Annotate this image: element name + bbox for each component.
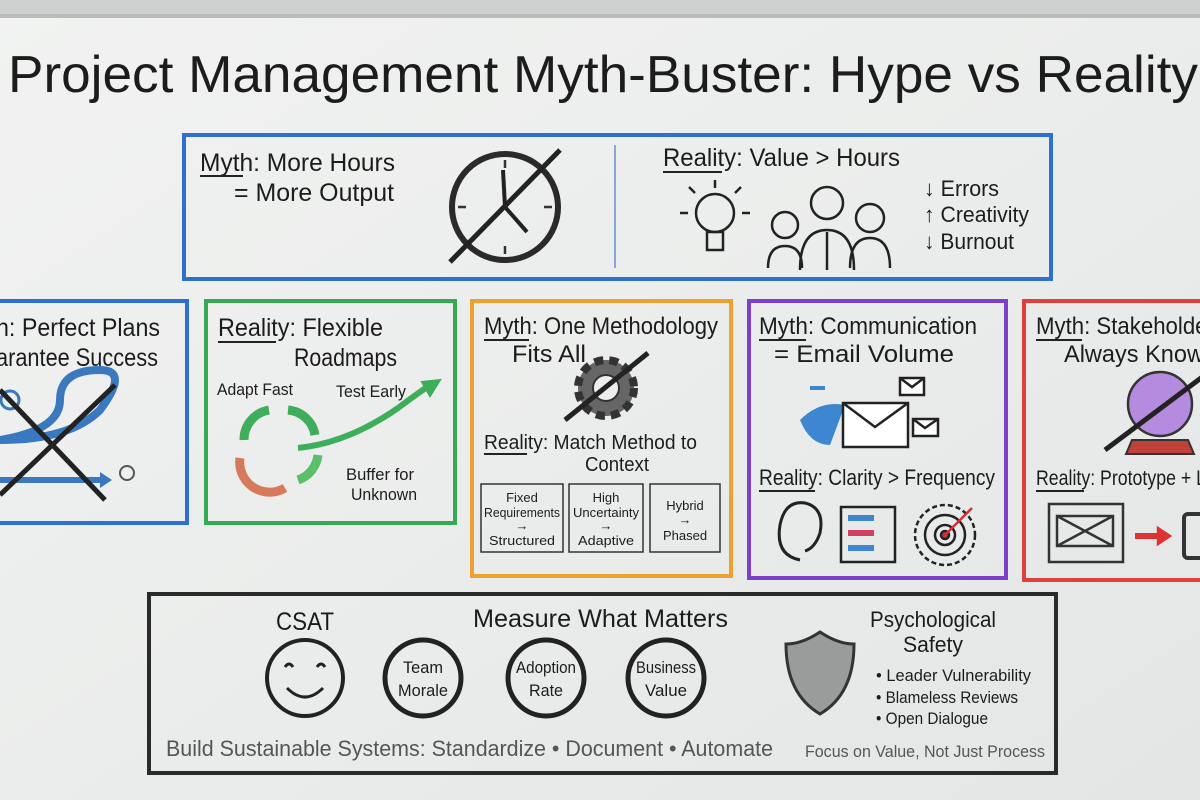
list: errors creativity burnout: ↓ Errors <box>924 176 999 201</box>
icon: crossed clock <box>450 150 560 262</box>
list: errors creativity burnout <box>924 176 1029 254</box>
panel: communication (purple): Myth: Communication <box>759 313 977 340</box>
panel: flexible roadmaps (green) <box>206 301 455 523</box>
psychological safety list: • Blameless Reviews <box>876 688 1018 707</box>
icon: crossed gear <box>565 353 648 420</box>
panel: stakeholders (red) <box>1024 301 1200 580</box>
list: errors creativity burnout: ↓ Burnout <box>924 229 1014 254</box>
metric: business value <box>628 640 704 716</box>
boxes: methodology options: High <box>593 490 619 505</box>
psychological safety list: Safety <box>903 632 963 657</box>
icon: light bulb <box>680 180 750 250</box>
boxes: methodology options: Structured <box>489 533 555 548</box>
panel: one methodology (orange): Myth: One Methodology <box>484 313 718 340</box>
panel: measure what matters: Measure What Matters <box>473 605 728 633</box>
metric: CSAT smiley: CSAT <box>276 608 334 636</box>
metric: CSAT smiley <box>267 608 343 716</box>
psychological safety list: Psychological <box>870 607 996 632</box>
psychological safety list: • Open Dialogue <box>876 709 988 728</box>
icon: target <box>915 505 975 565</box>
panel: perfect plans (blue): arantee Success <box>0 344 158 372</box>
metric: adoption rate: Rate <box>529 681 563 700</box>
metric: business value: Value <box>645 681 687 700</box>
panel: measure what matters: Focus on Value, Not Just Process <box>805 742 1045 761</box>
icon: wireframe to device <box>1049 504 1200 562</box>
panel: flexible roadmaps (green): Unknown <box>351 485 417 504</box>
panel: communication (purple): = Email Volume <box>774 341 954 368</box>
metric: adoption rate <box>508 640 584 716</box>
panel: flexible roadmaps (green): Reality: Flexible <box>218 314 383 342</box>
boxes: methodology options: → <box>516 518 528 533</box>
panel: measure what matters <box>149 594 1056 773</box>
boxes: methodology options: Adaptive <box>578 533 634 548</box>
panel: flexible roadmaps (green): Adapt Fast <box>217 380 293 399</box>
panel: communication (purple): Reality: Clarity > Frequency <box>759 465 995 490</box>
boxes: methodology options: Hybrid <box>666 498 704 513</box>
icon: shield <box>786 632 854 714</box>
icon: cycle arrows <box>240 380 440 492</box>
panel: flexible roadmaps (green): Test Early <box>336 382 406 401</box>
metric: adoption rate: Adoption <box>516 658 576 677</box>
boxes: methodology options: → <box>600 518 612 533</box>
myth text: Myth: More Hours <box>200 149 395 177</box>
metric: team morale: Team <box>403 658 443 677</box>
panel: one methodology (orange): Reality: Match Method to <box>484 432 697 454</box>
panel: one methodology (orange): Context <box>585 454 649 476</box>
panel: perfect plans (blue): h: Perfect Plans <box>0 314 160 342</box>
boxes: methodology options: Uncertainty <box>573 505 640 520</box>
boxes: methodology options: Phased <box>663 528 707 543</box>
boxes: methodology options: Requirements <box>484 505 560 520</box>
psychological safety list: • Leader Vulnerability <box>876 666 1031 685</box>
panel: flexible roadmaps (green): Buffer for <box>346 465 414 484</box>
boxes: methodology options: → <box>678 512 692 527</box>
icon: people <box>768 187 890 270</box>
boxes: methodology options: Fixed <box>506 490 538 505</box>
metric: team morale: Morale <box>398 681 448 700</box>
panel: one methodology (orange): Fits All <box>512 341 586 368</box>
metric: team morale <box>385 640 461 716</box>
myth text <box>200 149 395 207</box>
icon: crossed crystal ball <box>1105 372 1200 454</box>
icon: email flood <box>800 378 938 447</box>
reality text: Reality: Value > Hours <box>663 144 900 172</box>
footer text: Build Sustainable Systems: Standardize • Document • Automate <box>166 736 773 761</box>
icon: ear <box>779 503 821 560</box>
icon: crossed winding path <box>0 370 134 500</box>
panel: perfect plans (blue) <box>0 301 187 523</box>
list: errors creativity burnout: ↑ Creativity <box>924 202 1029 227</box>
panel: communication (purple) <box>749 301 1006 578</box>
icon: list <box>841 507 895 562</box>
psychological safety list <box>870 607 1031 728</box>
metric: business value: Business <box>636 658 696 677</box>
myth text: = More Output <box>234 179 394 207</box>
boxes: methodology options <box>481 484 720 552</box>
panel: one methodology (orange) <box>472 301 731 576</box>
panel: more hours myth/reality <box>184 135 1051 279</box>
panel: flexible roadmaps (green): Roadmaps <box>294 344 397 372</box>
title: Project Management Myth-Buster: Hype vs Reality <box>8 46 1198 104</box>
